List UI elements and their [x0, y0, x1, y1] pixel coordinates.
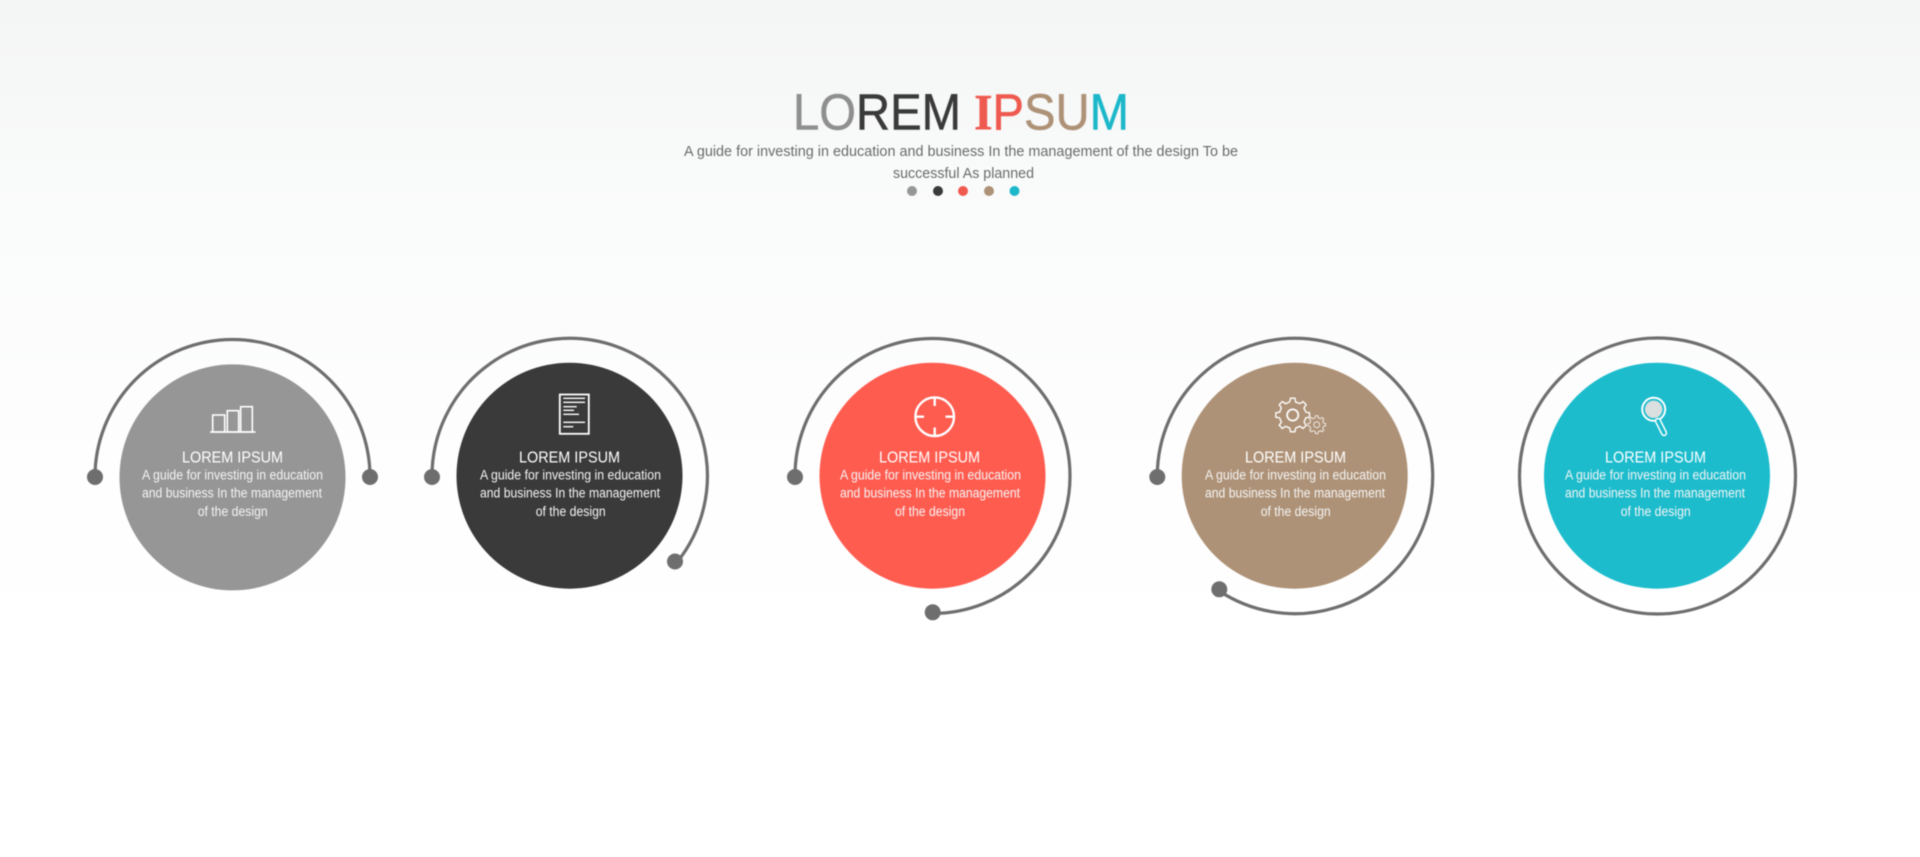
tan disc — [1182, 363, 1408, 589]
step 5 text: and business In the management — [1565, 486, 1745, 501]
step 2 text: LOREM IPSUM — [519, 450, 620, 467]
subtitle text — [684, 143, 1238, 182]
panel: step 1 grey — [87, 340, 378, 590]
panel: step 4 tan — [1149, 338, 1433, 614]
three-quarter ring with end dots — [424, 338, 707, 570]
step 5 text: of the design — [1621, 504, 1691, 519]
step 3 text — [840, 450, 1021, 519]
icon: document — [560, 394, 589, 434]
panel: step 5 teal — [1520, 338, 1796, 614]
step 2 text: A guide for investing in education — [480, 467, 661, 482]
step 1 text — [142, 450, 323, 519]
subtitle text: A guide for investing in education and business In the management of the design To be — [684, 143, 1238, 160]
step 3 text: and business In the management — [840, 486, 1020, 501]
step 2 text: of the design — [536, 504, 606, 519]
step 4 text: and business In the management — [1205, 486, 1385, 501]
step 5 text: A guide for investing in education — [1565, 467, 1746, 482]
step 2 text: and business In the management — [480, 486, 660, 501]
step 5 text — [1565, 450, 1746, 519]
dark disc — [456, 363, 682, 589]
step 3 text: of the design — [895, 504, 965, 519]
step 3 text: A guide for investing in education — [840, 467, 1021, 482]
full ring — [1520, 338, 1796, 614]
colour dots row — [907, 186, 1020, 196]
panel: step 3 red — [787, 339, 1070, 620]
teal disc — [1544, 363, 1770, 589]
step 1 text: and business In the management — [142, 486, 322, 501]
step 2 text — [480, 450, 661, 519]
step 4 text — [1205, 450, 1386, 519]
step 1 text: of the design — [198, 504, 268, 519]
icon: target — [915, 397, 954, 436]
grey disc — [120, 364, 346, 590]
icon: gears — [1276, 398, 1326, 434]
icon: magnifying glass — [1642, 398, 1665, 433]
step 1 text: LOREM IPSUM — [182, 450, 283, 467]
step 1 text: A guide for investing in education — [142, 467, 323, 482]
step 4 text: A guide for investing in education — [1205, 467, 1386, 482]
half ring with end dots — [87, 340, 378, 485]
ring with end dots — [1149, 338, 1433, 614]
ring with end dots — [787, 339, 1070, 620]
step 3 text: LOREM IPSUM — [879, 450, 980, 467]
step 5 text: LOREM IPSUM — [1605, 450, 1706, 467]
panel: step 2 dark — [424, 338, 707, 589]
subtitle text: successful As planned — [893, 165, 1034, 182]
red disc — [820, 363, 1046, 589]
title: LOREM IPSUM — [793, 84, 1129, 142]
step 4 text: of the design — [1261, 504, 1331, 519]
step 4 text: LOREM IPSUM — [1245, 450, 1346, 467]
icon: bar chart — [210, 407, 256, 432]
